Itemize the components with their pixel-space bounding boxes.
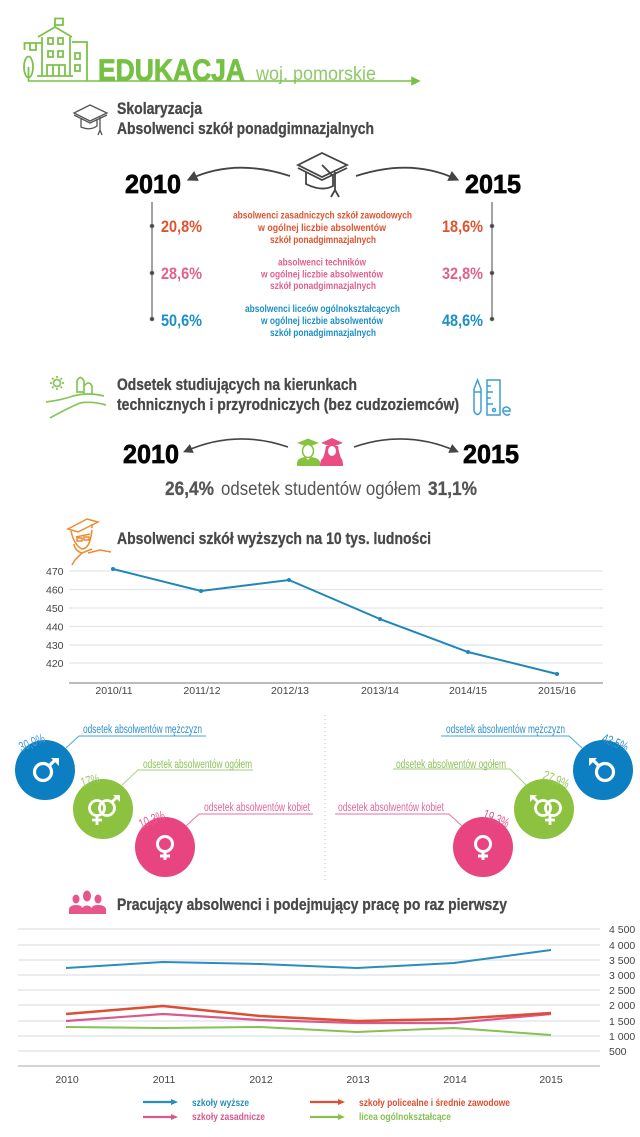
- heading: Pracujący absolwenci i podejmujący pracę po raz pierwszy: [117, 895, 507, 914]
- y axis labels: 500: [609, 1046, 627, 1058]
- data line: [111, 567, 559, 676]
- header: EDUKACJA woj. pomorskie: [24, 18, 419, 88]
- x axis labels: [95, 685, 576, 697]
- heading: [117, 375, 459, 414]
- y axis labels: 4 000: [609, 940, 635, 952]
- icon: ruler and pencil: [474, 380, 510, 415]
- heading: Odsetek studiujących na kierunkach: [117, 375, 357, 394]
- row: licea: absolwenci liceów ogólnokształcących: [245, 303, 400, 315]
- title: EDUKACJA: [98, 52, 245, 88]
- x axis labels: 2013/14: [361, 685, 399, 697]
- female circle: odsetek absolwentów kobiet: [204, 802, 311, 814]
- year 2010: 2010: [125, 169, 181, 199]
- row: technika: 32,8%: [442, 265, 483, 283]
- y axis labels: 2 500: [609, 985, 635, 997]
- arrow: header rule: [28, 78, 419, 84]
- panel: pracujący absolwenci: [18, 890, 635, 1123]
- row: technika: absolwenci techników: [278, 256, 367, 268]
- row: technika: w ogólnej liczbie absolwentów: [260, 268, 384, 280]
- icon: female graduate: [320, 438, 343, 466]
- x axis labels: 2013: [346, 1074, 370, 1086]
- x axis labels: 2012: [249, 1074, 273, 1086]
- panel: odsetek absolwentów left: [15, 724, 313, 877]
- row: licea: szkół ponadgimnazjalnych: [270, 327, 376, 339]
- heading: Absolwenci szkół ponadgimnazjalnych: [117, 119, 374, 138]
- timeline left: [150, 202, 154, 321]
- y axis labels: 440: [46, 622, 64, 634]
- y axis labels: 2 000: [609, 1000, 635, 1012]
- icon: male graduate: [297, 438, 320, 466]
- y axis labels: 4 500: [609, 924, 635, 936]
- x axis labels: 2011: [153, 1074, 175, 1086]
- y axis labels: 1 500: [609, 1016, 635, 1028]
- both genders circle: odsetek absolwentów ogółem: [396, 759, 506, 771]
- row: szkoły zawodowe: 20,8%: [161, 218, 202, 236]
- male circle: [15, 724, 206, 800]
- panel: absolwenci szkół wyższych: [46, 519, 603, 697]
- panel: szkoły ponadgimnazjalne: [74, 99, 521, 339]
- legend: szkoły zasadnicze: [192, 1111, 265, 1123]
- female circle: 19,3%: [481, 807, 512, 831]
- row: szkoły zawodowe: w ogólnej liczbie absolwentów: [257, 222, 387, 234]
- stat line: 31,1%: [428, 478, 477, 500]
- icon: small graduation cap: [74, 105, 107, 135]
- row: licea: [161, 303, 483, 339]
- icon: school building: [24, 18, 87, 81]
- male circle: 43,5%: [600, 731, 631, 755]
- row: licea: w ogólnej liczbie absolwentów: [260, 315, 384, 327]
- legend: licea ogólnokształcące: [359, 1111, 451, 1123]
- female circle: [335, 802, 513, 877]
- y axis labels: 450: [46, 603, 64, 615]
- stat line: 26,4%: [165, 478, 214, 500]
- y axis labels: 430: [46, 640, 64, 652]
- both genders circle: [393, 759, 574, 839]
- row: technika: [161, 256, 483, 292]
- subtitle: woj. pomorskie: [255, 64, 376, 85]
- icon: graduation cap: [298, 153, 347, 197]
- row: szkoły zawodowe: szkół ponadgimnazjalnych: [270, 234, 376, 246]
- arrow: to 2015: [354, 439, 456, 451]
- y axis labels: [46, 566, 64, 670]
- arrow: to 2010: [190, 168, 290, 179]
- both genders circle: [73, 759, 253, 839]
- heading: technicznych i przyrodniczych (bez cudzoziemców): [117, 395, 459, 414]
- y axis labels: 3 000: [609, 970, 635, 982]
- x axis labels: 2010: [55, 1074, 79, 1086]
- female circle: [135, 802, 313, 877]
- female circle: 10,3%: [136, 808, 167, 832]
- row: szkoły zawodowe: [161, 210, 483, 246]
- year 2010: 2010: [123, 439, 179, 469]
- icon: graduate face: [68, 519, 111, 565]
- y axis labels: 1 000: [609, 1031, 635, 1043]
- male circle: 30,0%: [16, 731, 47, 755]
- data lines: [66, 950, 551, 1035]
- row: szkoły zawodowe: absolwenci zasadniczych szkół zawodowych: [233, 210, 412, 222]
- x axis labels: 2014/15: [449, 685, 487, 697]
- x axis labels: 2014: [443, 1074, 467, 1086]
- panel: studenci kierunków technicznych: [46, 375, 519, 500]
- legend: [143, 1097, 510, 1123]
- line chart: [46, 566, 603, 697]
- x axis labels: 2011/12: [183, 685, 221, 697]
- heading: [117, 99, 374, 138]
- heading: Absolwenci szkół wyższych na 10 tys. ludności: [117, 529, 431, 548]
- x axis labels: 2015/16: [538, 685, 576, 697]
- x axis labels: 2015: [539, 1074, 563, 1086]
- arrow: to 2015: [356, 168, 456, 179]
- male circle: odsetek absolwentów mężczyzn: [446, 724, 565, 736]
- male circle: odsetek absolwentów mężczyzn: [83, 724, 202, 736]
- row: technika: szkół ponadgimnazjalnych: [270, 280, 376, 292]
- arrow: to 2010: [186, 439, 288, 451]
- icon: people: [69, 890, 106, 914]
- both genders circle: odsetek absolwentów ogółem: [143, 759, 252, 771]
- both genders circle: 27,9%: [541, 768, 572, 792]
- male circle: [441, 724, 633, 800]
- timeline right: [490, 202, 494, 321]
- stat line: odsetek studentów ogółem: [221, 478, 421, 500]
- legend: szkoły wyższe: [192, 1097, 249, 1109]
- x axis labels: 2012/13: [271, 685, 309, 697]
- row: szkoły zawodowe: 18,6%: [442, 218, 483, 236]
- y axis labels: 3 500: [609, 955, 635, 967]
- x axis labels: 2010/11: [95, 685, 133, 697]
- row: licea: 48,6%: [442, 312, 483, 330]
- panel: odsetek absolwentów right: [335, 724, 633, 877]
- y axis labels: 460: [46, 584, 64, 596]
- y axis labels: 420: [46, 658, 64, 670]
- legend: szkoły policealne i średnie zawodowe: [359, 1097, 510, 1109]
- y axis labels: [609, 924, 635, 1058]
- x axis labels: [55, 1074, 563, 1086]
- both genders circle: 17%: [79, 771, 101, 790]
- female circle: odsetek absolwentów kobiet: [338, 802, 445, 814]
- heading: Skolaryzacja: [117, 99, 202, 118]
- row: licea: 50,6%: [161, 312, 202, 330]
- year 2015: 2015: [463, 439, 519, 469]
- icon: landscape: [46, 376, 106, 418]
- line chart: [18, 924, 635, 1086]
- year 2015: 2015: [465, 169, 521, 199]
- y axis labels: 470: [46, 566, 64, 578]
- row: technika: 28,6%: [161, 265, 202, 283]
